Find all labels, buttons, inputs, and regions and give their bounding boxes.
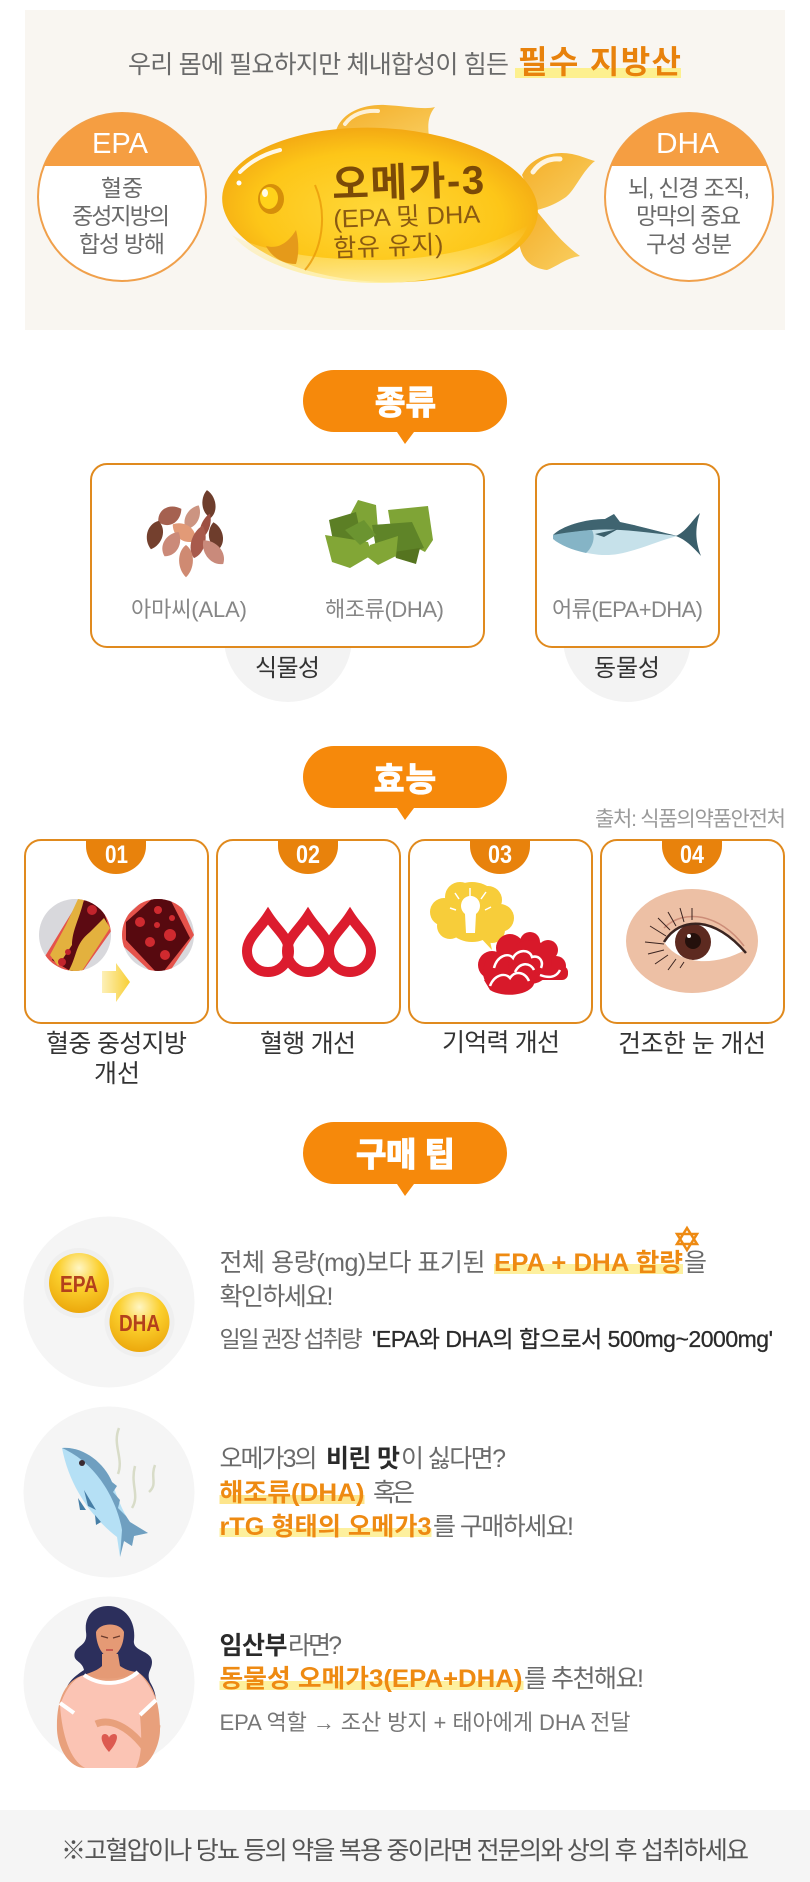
callout: EPA: 중성지방의 [72,203,170,229]
heading pill: types [303,370,507,444]
label: omega-3: (EPA 및 DHA [333,201,481,234]
badge 02 [278,840,338,874]
icon: blood drops [247,916,371,972]
label: seaweed: 해조류(DHA) [325,597,444,622]
panel: plant sources [91,464,484,702]
tip text: 해조류(DHA) [220,1479,364,1507]
label: 혈중 중성지방 [46,1030,187,1058]
tip text: 'EPA와 DHA의 합으로서 500mg~2000mg' [372,1326,773,1352]
icon: star [677,1228,697,1250]
label: omega-3: 오메가-3 [331,158,485,208]
heading: essential fatty acid [128,44,681,80]
icon: tuna [553,513,701,556]
badge 01 [86,840,146,874]
callout: EPA: 혈중 [101,175,143,201]
badge 03: 03 [488,841,512,869]
icon: brain [478,932,568,995]
tip text [220,1445,574,1541]
tip text: 일일 권장 섭취량 [220,1326,362,1352]
label: omega-3 [330,158,487,263]
heading: essential fatty acid: 우리 몸에 필요하지만 체내합성이 힘든 [128,51,509,79]
card 01: blood triglyceride [25,840,208,1088]
heading pill: types: 종류 [375,384,436,421]
label: omega-3: 함유 유지) [333,231,444,263]
callout: DHA: DHA [656,128,720,160]
callout: DHA [605,113,773,281]
callout: DHA: 뇌, 신경 조직, [628,175,750,201]
footer caution [0,1810,810,1882]
badge 04 [662,840,722,874]
tip 3: pregnant [24,1596,644,1768]
tip 1: check EPA + DHA content [24,1216,773,1388]
callout: EPA: EPA [92,128,149,160]
card 04: dry eye [601,840,784,1058]
footer caution: ※고혈압이나 당뇨 등의 약을 복용 중이라면 전문의와 상의 후 섭취하세요 [61,1837,749,1865]
icon: DHA capsule [104,1287,174,1357]
heading pill: buying tips: 구매 팁 [356,1136,455,1173]
icon: fish [62,1448,148,1557]
tip text: 라면? [288,1632,342,1660]
card 02: circulation [217,840,400,1058]
icon: smell lines [117,1428,155,1508]
callout: DHA: 구성 성분 [646,231,732,257]
badge 02: 02 [296,841,320,869]
tip 2: fishy taste [24,1406,574,1578]
tip text: 확인하세요! [220,1283,334,1311]
tip text: 오메가3의 [220,1445,318,1473]
heading pill: buying tips [303,1122,507,1196]
label: plant-based: 식물성 [255,655,320,682]
arrow [102,963,130,1002]
tip text [220,1632,644,1735]
icon: flaxseed [143,489,229,577]
label: 기억력 개선 [442,1029,560,1057]
icon: EPA capsule: EPA [60,1271,98,1297]
tip text: 동물성 오메가3(EPA+DHA) [220,1665,522,1693]
tip text: 비린 맛 [326,1445,400,1473]
badge 04: 04 [680,841,704,869]
tip text: EPA + DHA 함량 [494,1249,683,1277]
label: 개선 [94,1060,140,1088]
tip text: EPA 역할 → 조산 방지 + 태아에게 DHA 전달 [220,1710,630,1735]
badge 03 [470,840,530,874]
callout: EPA: 합성 방해 [79,231,165,257]
heading: essential fatty acid: 필수 지방산 [518,44,681,80]
icon: eye [626,889,758,993]
label: animal-based: 동물성 [594,655,660,682]
source note: 출처: 식품의약품안전처 [595,808,786,831]
icon: idea cloud [430,882,514,950]
label: flaxseed: 아마씨(ALA) [131,597,247,622]
callout: EPA [38,113,206,281]
tip text: 혹은 [373,1479,415,1507]
icon: golden omega-3 fish capsule [218,105,595,290]
heading pill: efficacy: 효능 [374,761,436,798]
heading pill: efficacy [303,746,507,820]
label: 혈행 개선 [260,1030,356,1058]
label: 건조한 눈 개선 [618,1030,766,1058]
icon: DHA capsule: DHA [119,1310,160,1336]
icon: pregnant woman [57,1606,160,1768]
tip text: 을 [684,1249,707,1277]
tip text: rTG 형태의 오메가3 [220,1513,432,1541]
callout: DHA: 망막의 중요 [636,203,741,229]
tip text: 를 추천해요! [524,1665,644,1693]
icon: clogged vessel [39,899,112,975]
icon: clean vessel [122,899,194,971]
tip text [220,1249,773,1352]
tip text: 이 싫다면? [401,1445,506,1473]
panel: animal sources [536,464,719,702]
label: fish: 어류(EPA+DHA) [552,597,703,622]
label [46,1030,187,1088]
panel: essential fatty acid intro [25,10,785,330]
badge 01: 01 [105,841,128,869]
card 03: memory [409,840,592,1057]
tip text: 를 구매하세요! [433,1513,574,1541]
icon: seaweed [325,500,433,568]
tip text: 전체 용량(mg)보다 표기된 [220,1249,486,1277]
icon: EPA capsule [44,1248,114,1318]
tip text: 임산부 [220,1632,288,1660]
